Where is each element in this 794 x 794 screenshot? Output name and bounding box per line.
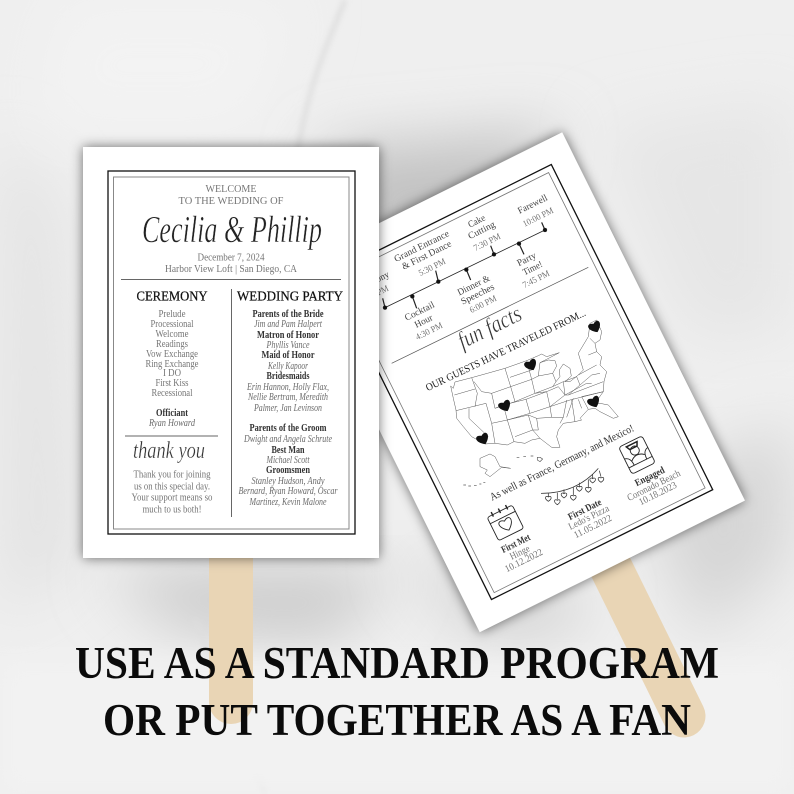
timeline labels: 3:30 PM [360, 283, 390, 305]
bottom headline [75, 638, 719, 745]
ceremony order list: Welcome [156, 329, 189, 340]
wedding party list: Kelly Kapoor [267, 361, 308, 372]
engaged text: Coronado Beach [626, 468, 682, 504]
wedding party list [238, 309, 338, 508]
card sheet [83, 147, 379, 558]
wedding party list: Martinez, Kevin Malone [249, 497, 327, 508]
thank you message: Your support means so [132, 492, 212, 504]
alaska [480, 454, 511, 477]
wedding party list: Bernard, Ryan Howard, Oscar [238, 486, 338, 497]
fun facts script heading: fun facts [454, 301, 526, 354]
ceremony order list: Prelude [158, 309, 186, 320]
US map [451, 320, 618, 486]
timeline labels [353, 193, 555, 342]
wedding party list: Nellie Bertram, Meredith [247, 392, 328, 403]
hawaii and aleutians [463, 456, 543, 486]
wedding party list: Bridesmaids [266, 371, 310, 382]
left fan paddle stick [209, 540, 253, 702]
welcome heading: WELCOME [206, 184, 256, 195]
bottom headline: USE AS A STANDARD PROGRAM [75, 638, 719, 688]
couple names script: Cecilia & Phillip [142, 209, 322, 251]
timeline labels: Cutting [467, 220, 497, 242]
timeline labels: Speeches [460, 282, 497, 307]
thank you message [132, 470, 212, 516]
timeline labels: Hour [413, 313, 435, 331]
first date text [566, 497, 614, 541]
officiant [148, 408, 196, 429]
timeline labels: Cake [467, 214, 487, 230]
ceremony order list: Ring Exchange [146, 359, 199, 370]
first date text: 11.05.2022 [572, 513, 614, 541]
ceremony order list: I DO [163, 368, 181, 379]
double border frame [108, 171, 355, 534]
bottom headline: OR PUT TOGETHER AS A FAN [103, 695, 691, 745]
first met text [500, 532, 545, 575]
timeline [383, 222, 588, 363]
welcome heading: TO THE WEDDING OF [178, 196, 284, 207]
timeline labels: Cocktail [403, 300, 437, 324]
first met text: First Met [500, 532, 533, 556]
engaged text: Engaged [633, 465, 667, 489]
wedding party list: Erin Hannon, Holly Flax, [246, 382, 329, 393]
panel: rotated fan card (back side) [297, 132, 745, 632]
icon: ring box [619, 436, 655, 474]
wedding party list: Parents of the Bride [252, 309, 324, 320]
timeline labels: & First Dance [401, 240, 453, 272]
timeline labels: 4:30 PM [414, 320, 444, 342]
countries note: As well as France, Germany, and Mexico! [488, 423, 636, 503]
date and venue: December 7, 2024 [198, 252, 265, 264]
first met text: 10.12.2022 [503, 547, 545, 575]
thank you message: Thank you for joining [134, 470, 211, 480]
timeline labels: 7:30 PM [472, 231, 502, 253]
ceremony order list: Processional [150, 319, 194, 330]
ceremony order list: Recessional [152, 388, 193, 399]
timeline labels: Time! [521, 260, 545, 278]
welcome heading [178, 184, 284, 207]
wedding party list: Stanley Hudson, Andy [252, 476, 325, 487]
icon: heart bunting [541, 468, 604, 505]
wedding party list: Groomsmen [266, 465, 310, 476]
ceremony order list: First Kiss [156, 378, 189, 389]
wedding party list: Matron of Honor [257, 330, 319, 341]
wedding party list: Maid of Honor [262, 350, 315, 361]
first met text: Hinge [508, 543, 532, 563]
thank you message: us on this special day. [134, 482, 210, 492]
wedding party list: Parents of the Groom [250, 423, 327, 434]
thank you script: thank you [133, 438, 205, 464]
wedding party list: Jim and Pam Halpert [254, 319, 322, 330]
first date text: Ledo's Pizza [567, 503, 612, 533]
timeline labels: 7:45 PM [521, 268, 551, 290]
wedding party list: Michael Scott [266, 455, 310, 466]
engaged text: 10.18.2023 [637, 480, 679, 508]
wedding party heading: WEDDING PARTY [237, 288, 343, 304]
wedding party list: Phyllis Vance [266, 340, 310, 351]
wedding party list: Palmer, Jan Levinson [253, 403, 322, 414]
dividers [121, 280, 341, 517]
icon: calendar heart [486, 502, 524, 541]
map heading: OUR GUESTS HAVE TRAVELED FROM... [424, 308, 588, 394]
timeline labels: 10:00 PM [521, 205, 555, 229]
ceremony heading: CEREMONY [136, 288, 208, 304]
officiant: Ryan Howard [148, 418, 196, 429]
map hearts [475, 320, 603, 447]
ceremony order list: Readings [156, 339, 188, 350]
panel: front program card [83, 147, 379, 558]
timeline labels: Party [516, 251, 538, 269]
thank you message: much to us both! [142, 504, 202, 516]
ceremony order list: Vow Exchange [146, 349, 198, 360]
officiant: Officiant [156, 408, 189, 419]
timeline labels: Ceremony [353, 270, 391, 296]
wedding party list: Best Man [272, 445, 305, 456]
right fan paddle stick [585, 515, 684, 716]
ceremony order list [146, 309, 199, 399]
timeline labels: 5:30 PM [417, 256, 447, 278]
timeline labels: Dinner & [456, 273, 492, 298]
wedding party list: Dwight and Angela Schrute [243, 434, 332, 445]
double border frame [330, 165, 713, 600]
timeline labels: 6:00 PM [468, 293, 498, 315]
date and venue [165, 252, 297, 275]
timeline labels: Grand Entrance [393, 229, 451, 265]
card sheet [297, 132, 745, 632]
date and venue: Harbor View Loft | San Diego, CA [165, 264, 297, 275]
timeline labels: Farewell [516, 193, 550, 217]
first date text: First Date [566, 497, 604, 523]
